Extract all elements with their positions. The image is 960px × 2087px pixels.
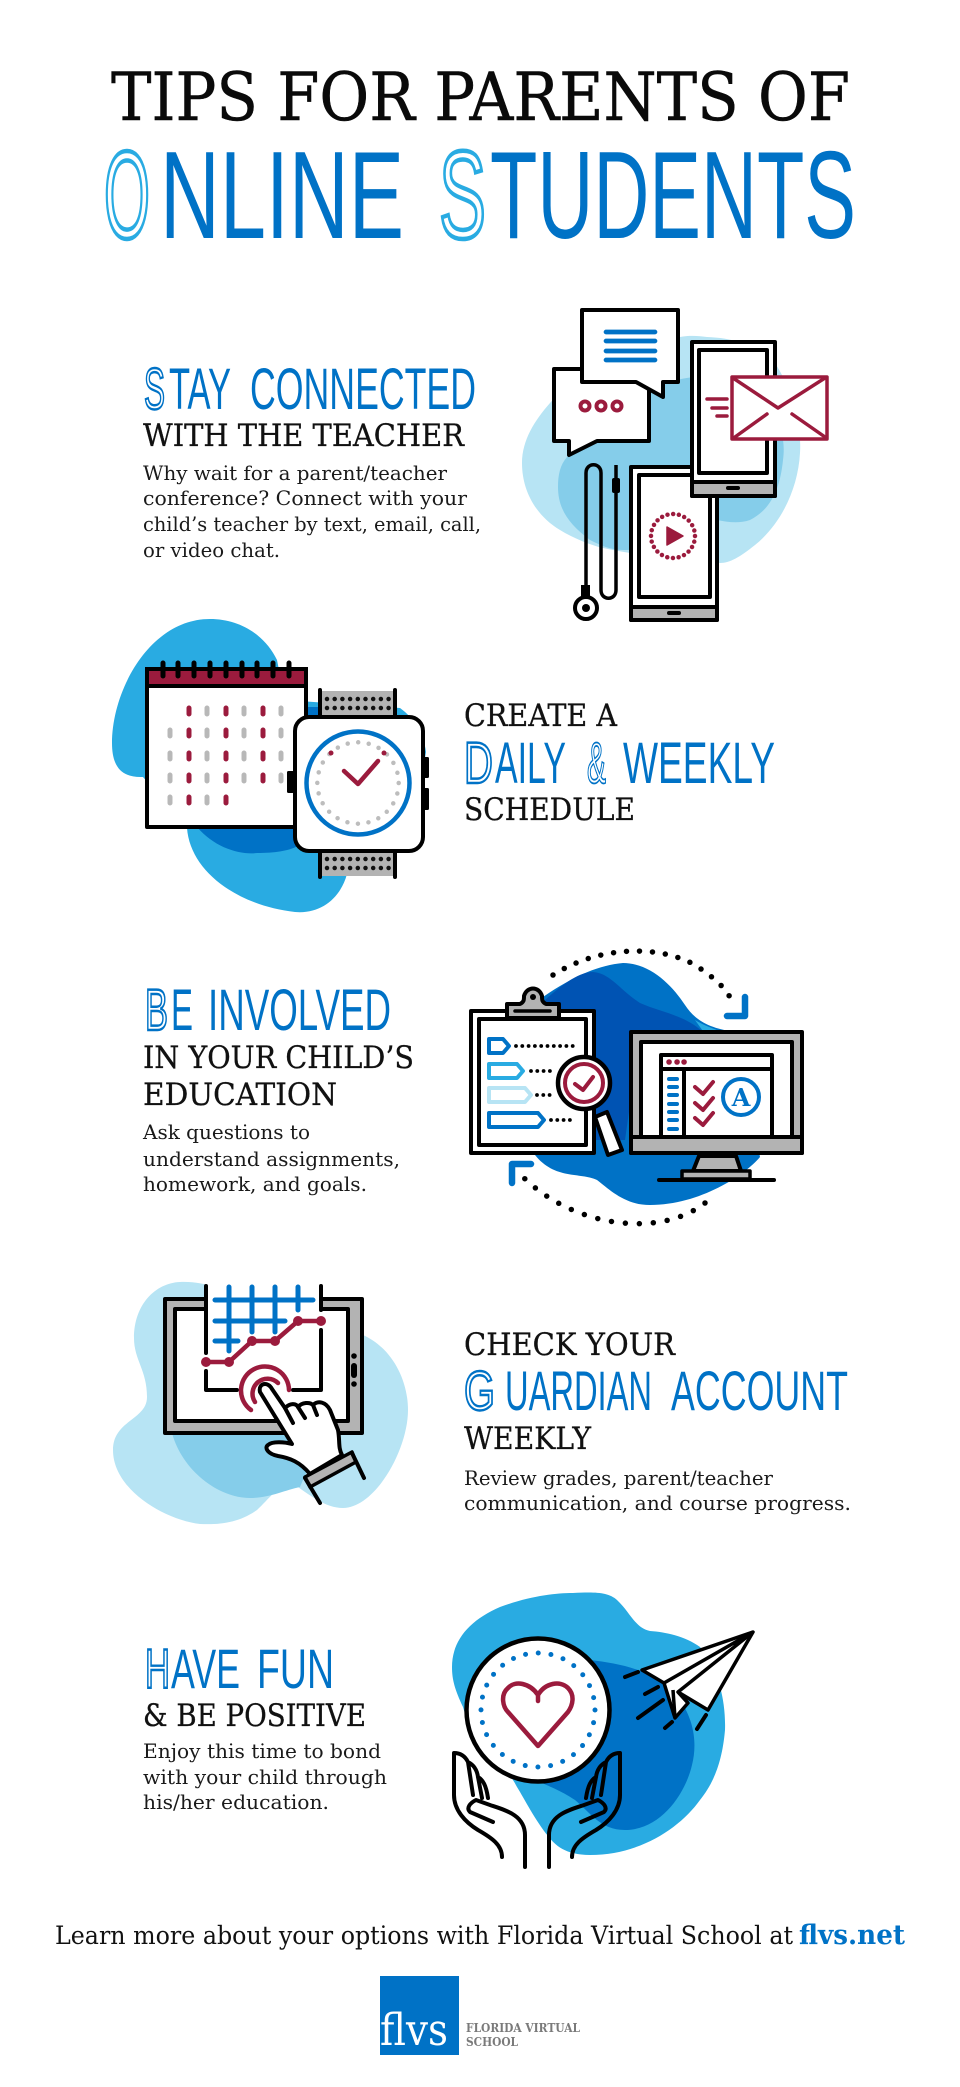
section 5 text: have fun: AVE bbox=[171, 1637, 240, 1700]
section 3 text: be involved: B bbox=[145, 978, 168, 1043]
section 4 text: guardian account bbox=[464, 1327, 851, 1515]
hands bbox=[454, 1753, 620, 1867]
section 3 text: be involved: INVOLVED bbox=[208, 978, 391, 1043]
illustration: calendar and watch bbox=[112, 619, 429, 912]
illustration: heart, hands and paper plane bbox=[452, 1593, 753, 1867]
section 3 text: be involved: homework, and goals. bbox=[143, 1172, 367, 1196]
watch bbox=[287, 690, 429, 877]
hand bbox=[260, 1384, 364, 1503]
section 3 text: be involved bbox=[142, 978, 414, 1196]
section 5 text: have fun bbox=[143, 1637, 387, 1814]
section 2 text: daily and weekly schedule: CREATE A bbox=[464, 698, 618, 734]
section 2 text: daily and weekly schedule: SCHEDULE bbox=[464, 792, 635, 828]
monitor: A bbox=[731, 1083, 751, 1112]
right phone bbox=[692, 342, 775, 496]
section 2 text: daily and weekly schedule: D bbox=[464, 731, 493, 796]
section 1 text: stay connected: S bbox=[144, 357, 165, 422]
footer call to action: Learn more about your options with Florida Virtual School at bbox=[55, 1921, 793, 1950]
circle with heart bbox=[466, 1638, 610, 1782]
section 1 text: stay connected: or video chat. bbox=[143, 538, 280, 562]
section 1 text: stay connected: CONNECTED bbox=[250, 357, 476, 422]
section 5 text: have fun: H bbox=[145, 1637, 170, 1700]
section 1 text: stay connected: child’s teacher by text, email, call, bbox=[143, 512, 481, 536]
section 3 text: be involved: E bbox=[171, 978, 193, 1043]
logo bbox=[380, 1976, 580, 2056]
section 4 text: guardian account: Review grades, parent/teacher bbox=[464, 1466, 773, 1490]
section 5 text: have fun: with your child through bbox=[143, 1765, 387, 1789]
envelope bbox=[707, 377, 827, 439]
monitor bbox=[631, 1032, 802, 1180]
bottom phone bbox=[631, 467, 717, 620]
illustration: clipboard and monitor bbox=[471, 951, 802, 1224]
calendar bbox=[147, 663, 306, 827]
section 5 text: have fun: his/her education. bbox=[143, 1790, 329, 1814]
title: O bbox=[104, 127, 150, 265]
section 5 text: have fun: & BE POSITIVE bbox=[143, 1698, 366, 1734]
section 5 text: have fun: FUN bbox=[257, 1637, 334, 1700]
section 4 text: guardian account: communication, and course progress. bbox=[464, 1491, 851, 1515]
section 2 text: daily and weekly schedule: & bbox=[587, 731, 606, 796]
logo: FLORIDA VIRTUAL bbox=[466, 2020, 580, 2035]
section 1 text: stay connected: Why wait for a parent/teacher bbox=[143, 461, 447, 485]
clipboard bbox=[471, 988, 594, 1153]
paper plane bbox=[625, 1632, 753, 1729]
section 1 text: stay connected: WITH THE TEACHER bbox=[143, 418, 466, 454]
title: NLINE bbox=[160, 127, 404, 265]
magnifying glass bbox=[558, 1057, 622, 1155]
section 1 text: stay connected: TAY bbox=[169, 357, 231, 422]
footer call to action: flvs.net bbox=[799, 1920, 906, 1951]
earphones bbox=[575, 465, 620, 619]
logo: flvs bbox=[380, 2005, 448, 2056]
section 4 text: guardian account: G bbox=[464, 1359, 495, 1422]
illustration: devices and messages bbox=[522, 310, 827, 620]
section 3 text: be involved: EDUCATION bbox=[143, 1077, 337, 1113]
section 2 text: daily and weekly schedule: WEEKLY bbox=[623, 731, 775, 796]
tablet bbox=[165, 1280, 362, 1433]
speech bubble with lines bbox=[582, 310, 678, 397]
touch ripple bbox=[241, 1367, 289, 1410]
title: TIPS FOR PARENTS OF bbox=[111, 59, 850, 136]
title bbox=[104, 59, 856, 265]
dotted arrows bbox=[512, 951, 745, 1224]
section 1 text: stay connected: conference? Connect with your bbox=[143, 486, 467, 510]
section 4 text: guardian account: CHECK YOUR bbox=[464, 1327, 677, 1363]
section 3 text: be involved: IN YOUR CHILD’S bbox=[143, 1040, 414, 1076]
chart grid and line bbox=[201, 1287, 326, 1367]
title: S bbox=[439, 127, 486, 265]
section 4 text: guardian account: UARDIAN bbox=[505, 1359, 652, 1422]
speech bubble with dots bbox=[554, 369, 649, 455]
logo: SCHOOL bbox=[466, 2034, 518, 2049]
section 3 text: be involved: Ask questions to bbox=[142, 1120, 310, 1144]
section 3 text: be involved: understand assignments, bbox=[143, 1147, 400, 1171]
section 1 text: stay connected bbox=[143, 357, 481, 562]
illustration: tablet and touching hand bbox=[113, 1280, 408, 1524]
section 4 text: guardian account: ACCOUNT bbox=[671, 1359, 848, 1422]
section 2 text: daily and weekly schedule bbox=[464, 698, 775, 828]
section 4 text: guardian account: WEEKLY bbox=[464, 1421, 591, 1457]
section 5 text: have fun: Enjoy this time to bond bbox=[143, 1739, 381, 1763]
section 2 text: daily and weekly schedule: AILY bbox=[495, 731, 566, 796]
